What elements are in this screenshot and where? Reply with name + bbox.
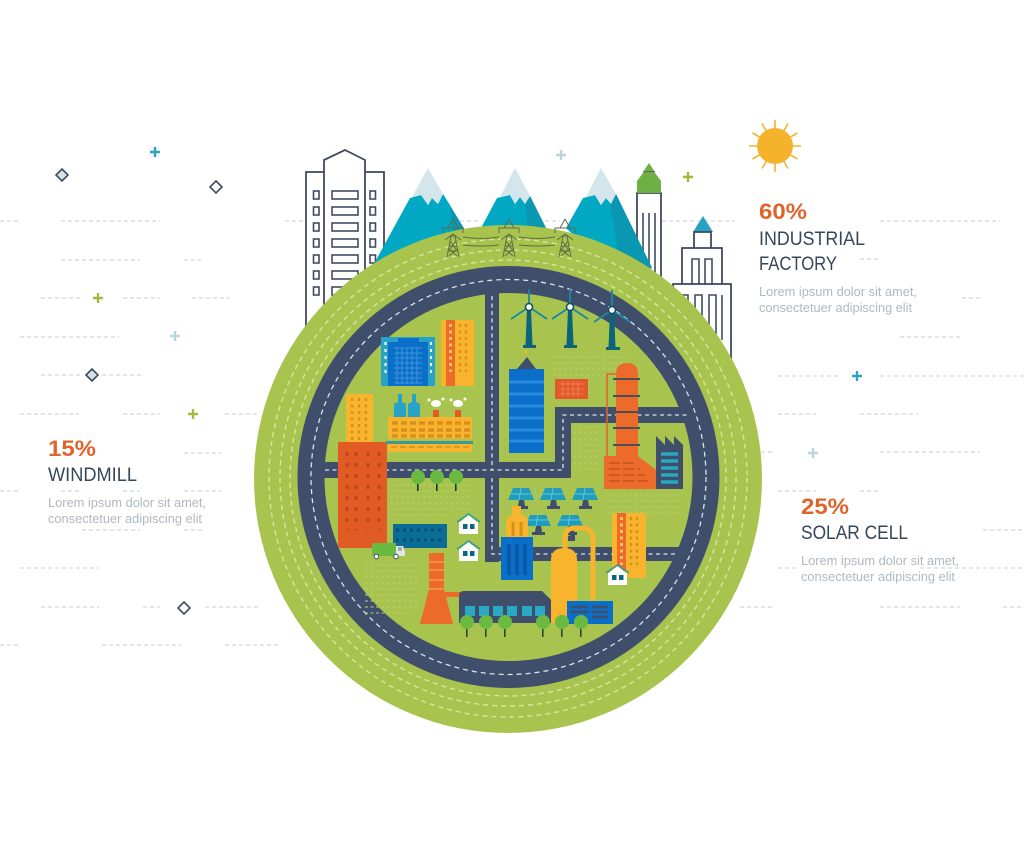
text block: 25% solar cell: Lorem ipsum dolor sit amet,: [801, 553, 959, 568]
truck: [372, 543, 405, 559]
skyline: left tower: [306, 150, 384, 340]
blue tower with roof: [509, 350, 544, 453]
text block: 15% windmill: 15%: [48, 436, 96, 461]
factory with silos and smoke: [386, 394, 473, 452]
red solar panel: [555, 379, 588, 399]
yellow block left: [346, 394, 373, 444]
yellow tank and pipe: [551, 528, 593, 623]
blue control box: [567, 601, 613, 624]
refinery tower: [604, 363, 656, 489]
text block: 15% windmill: consectetuer adipiscing elit: [48, 511, 202, 526]
text block: 25% solar cell: [801, 494, 959, 584]
text block: 60% industrial factory: 60%: [759, 199, 807, 224]
yellow apartment block: [441, 320, 474, 386]
domed blue building: [501, 506, 533, 580]
text block: 15% windmill: WINDMILL: [48, 465, 137, 486]
text block: 60% industrial factory: Lorem ipsum dolor sit amet,: [759, 284, 917, 299]
red tower: [338, 442, 387, 548]
road ring: [311, 280, 706, 674]
trees upper: [411, 470, 463, 491]
teal long building: [393, 524, 447, 548]
text block: 60% industrial factory: [759, 199, 917, 315]
text block: 15% windmill: [48, 436, 206, 526]
trees lower: [460, 615, 588, 637]
dark hall with windows: [459, 591, 551, 623]
text block: 25% solar cell: SOLAR CELL: [801, 523, 908, 544]
text block: 25% solar cell: consectetuer adipiscing elit: [801, 569, 955, 584]
skyline: right tower: [673, 216, 731, 364]
blue hotel building: [381, 337, 435, 386]
field dot patterns: [365, 357, 680, 613]
inner roads: [323, 290, 691, 562]
icon: diamond markers: [56, 169, 222, 614]
dark factory: [656, 436, 683, 489]
text block: 60% industrial factory: INDUSTRIAL: [759, 229, 865, 250]
text block: 60% industrial factory: FACTORY: [759, 254, 837, 275]
icon: sun: [749, 120, 801, 172]
icon: plus markers: [93, 147, 862, 458]
mountains: [375, 168, 652, 280]
ring dashed paths: [269, 239, 747, 717]
text block: 60% industrial factory: consectetuer adipiscing elit: [759, 300, 912, 315]
houses: [457, 514, 629, 585]
text block: 15% windmill: Lorem ipsum dolor sit amet,: [48, 495, 206, 510]
power pylons and wires: [443, 219, 575, 257]
wind turbines: [511, 289, 630, 350]
earth disc: [254, 225, 762, 733]
yellow apartment lower: [612, 513, 646, 578]
skyline: pencil tower: [637, 163, 661, 283]
solar panels: [508, 488, 598, 535]
orange smokestack: [420, 553, 464, 624]
text block: 25% solar cell: 25%: [801, 494, 849, 519]
